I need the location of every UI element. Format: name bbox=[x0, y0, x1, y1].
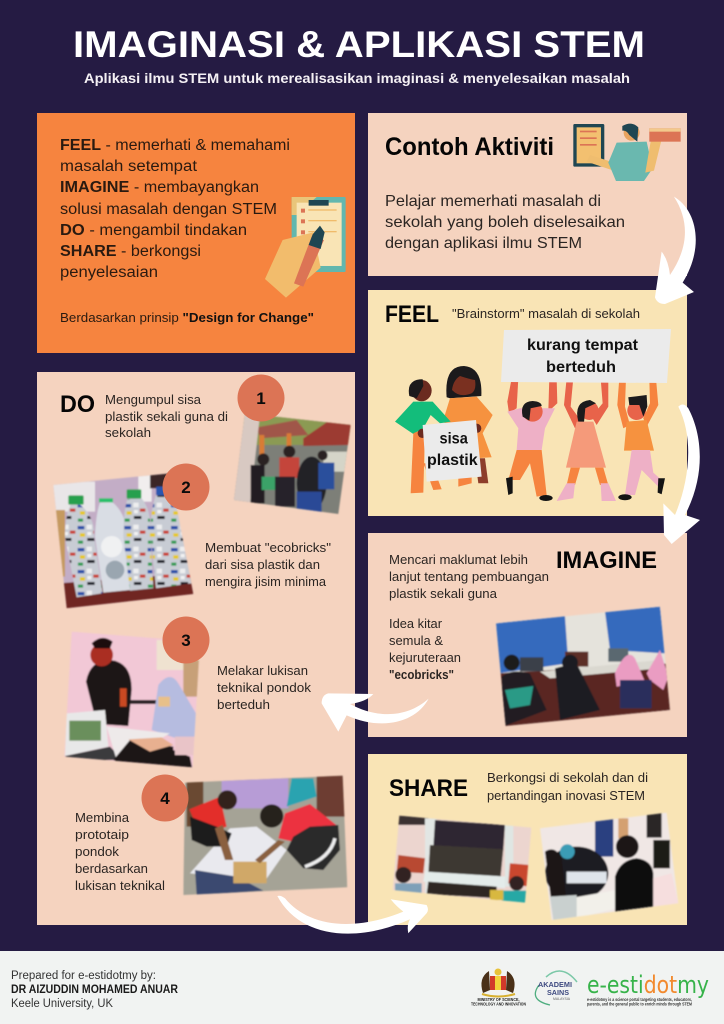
number badge 4: 4 bbox=[160, 789, 170, 808]
number badge 3: 3 bbox=[181, 631, 191, 650]
text block: Berkongsi di sekolah dan di bbox=[487, 770, 648, 785]
credit text bbox=[11, 970, 179, 1010]
step 1 text: sekolah bbox=[105, 425, 151, 440]
text block: feel imagine do share definitions: IMAGINE - membayangkan bbox=[60, 179, 259, 196]
step 3 text: teknikal pondok bbox=[217, 680, 312, 695]
caption: "Brainstorm" masalah di sekolah bbox=[452, 306, 640, 321]
panel: do bbox=[37, 372, 357, 925]
heading: IMAGINE bbox=[556, 547, 657, 574]
photo 4: building prototype bbox=[180, 773, 350, 897]
photo: competition booth bbox=[537, 812, 683, 922]
text block: feel imagine do share definitions: masalah setempat bbox=[60, 158, 198, 175]
logo: akademi sains malaysia: SAINS bbox=[547, 988, 569, 997]
logo: ministry crest: TECHNOLOGY AND INNOVATION bbox=[471, 1002, 526, 1006]
text block: research: plastik sekali guna bbox=[389, 586, 498, 601]
text block: idea: semula & bbox=[389, 633, 443, 648]
step 2 text: dari sisa plastik dan bbox=[205, 557, 320, 572]
girl in patterned dress bbox=[557, 378, 616, 501]
text block bbox=[385, 193, 625, 252]
girl in orange dress bbox=[443, 366, 493, 487]
illustration: children bbox=[395, 366, 665, 501]
photo 3: technical sketch bbox=[62, 630, 203, 770]
logo: akademi sains malaysia bbox=[535, 971, 577, 1005]
text block: feel imagine do share definitions bbox=[60, 137, 290, 281]
number badge 3 bbox=[162, 616, 210, 664]
panel: share bbox=[368, 754, 687, 925]
logo: akademi sains malaysia: AKADEMI bbox=[538, 980, 572, 989]
text block: feel imagine do share definitions: SHARE - berkongsi bbox=[60, 243, 201, 260]
text block: feel imagine do share definitions: penyelesaian bbox=[60, 264, 158, 281]
step 3 text bbox=[217, 663, 312, 712]
step 4 text bbox=[75, 810, 165, 893]
number badge 1: 1 bbox=[256, 389, 266, 408]
sign: kurang tempat berteduh: kurang tempat bbox=[527, 337, 639, 354]
text block: dengan aplikasi ilmu STEM bbox=[385, 235, 582, 252]
credit text: DR AIZUDDIN MOHAMED ANUAR bbox=[11, 984, 179, 996]
boy in pink shirt bbox=[506, 378, 557, 501]
step 2 text bbox=[205, 540, 331, 589]
step 4 text: prototaip bbox=[75, 827, 129, 842]
text block bbox=[487, 770, 648, 803]
logo: e-estidotmy: e-estidotmy bbox=[587, 971, 709, 999]
number badge 4 bbox=[142, 774, 188, 822]
step 4 text: Membina bbox=[75, 810, 130, 825]
logo: ministry crest: MINISTRY OF SCIENCE, bbox=[478, 997, 520, 1002]
subtitle: Aplikasi ilmu STEM untuk merealisasikan imaginasi & menyelesaikan masalah bbox=[84, 70, 630, 86]
step 1 text: Mengumpul sisa bbox=[105, 392, 202, 407]
text block: research: Mencari maklumat lebih bbox=[389, 552, 528, 567]
credit text: Keele University, UK bbox=[11, 998, 113, 1010]
text block: feel imagine do share definitions: solusi masalah dengan STEM bbox=[60, 201, 277, 218]
text block: idea bbox=[389, 616, 461, 682]
step 1 text: plastik sekali guna di bbox=[105, 409, 228, 424]
logo: e-estidotmy: parents, and the general public to enrich minds through STEM bbox=[587, 1002, 692, 1006]
text block: idea: "ecobricks" bbox=[389, 667, 454, 682]
number badge 1 bbox=[238, 374, 284, 422]
number badge 2 bbox=[162, 464, 210, 510]
credit text: Prepared for e-estidotmy by: bbox=[11, 970, 156, 982]
panel: contoh aktiviti bbox=[368, 113, 687, 276]
logo: akademi sains malaysia: MALAYSIA bbox=[553, 997, 571, 1001]
step 3 text: berteduh bbox=[217, 697, 270, 712]
text block: sekolah yang boleh diselesaikan bbox=[385, 214, 625, 231]
text block: research bbox=[389, 552, 549, 601]
text block: feel imagine do share definitions: DO - mengambil tindakan bbox=[60, 222, 247, 239]
heading: SHARE bbox=[389, 775, 468, 802]
photo 1: collecting plastic bbox=[234, 414, 352, 515]
panel: imagine bbox=[368, 533, 687, 737]
text block: research: lanjut tentang pembuangan bbox=[389, 569, 549, 584]
photo 2: ecobricks bbox=[50, 470, 197, 612]
title: IMAGINASI & APLIKASI STEM bbox=[73, 24, 645, 65]
text block: pertandingan inovasi STEM bbox=[487, 788, 645, 803]
photo: school sharing bbox=[390, 813, 533, 905]
footer band bbox=[0, 951, 724, 1024]
text block: Pelajar memerhati masalah di bbox=[385, 193, 601, 210]
arrow: feel to imagine bbox=[663, 405, 700, 544]
sign: sisa plastik bbox=[423, 420, 482, 482]
step 1 text bbox=[105, 392, 228, 440]
text block: idea: Idea kitar bbox=[389, 616, 443, 631]
text block: idea: kejuruteraan bbox=[389, 650, 461, 665]
boy in orange shirt bbox=[617, 378, 665, 500]
step 2 text: mengira jisim minima bbox=[205, 574, 327, 589]
sign: sisa plastik: plastik bbox=[427, 452, 478, 469]
panel: feel bbox=[368, 290, 687, 516]
icon: person with clipboard bbox=[573, 124, 681, 181]
note: design for change: Berdasarkan prinsip "Design for Change" bbox=[60, 310, 314, 325]
arrow: do to share bbox=[277, 896, 428, 934]
boy in green shirt bbox=[395, 379, 451, 493]
step 4 text: berdasarkan bbox=[75, 861, 148, 876]
arrow: contoh to feel bbox=[655, 197, 696, 304]
sign: kurang tempat berteduh bbox=[501, 329, 671, 383]
sign: kurang tempat berteduh: berteduh bbox=[546, 359, 616, 376]
heading: Contoh Aktiviti bbox=[385, 133, 554, 161]
step 4 text: lukisan teknikal bbox=[75, 878, 165, 893]
number badge 2: 2 bbox=[181, 478, 191, 497]
photo: computer lab bbox=[493, 605, 673, 728]
sign: sisa plastik: sisa bbox=[439, 430, 468, 447]
panel: principles bbox=[37, 113, 355, 353]
text block: feel imagine do share definitions: FEEL - memerhati & memahami bbox=[60, 137, 290, 154]
arrow: imagine to do bbox=[322, 693, 429, 732]
step 3 text: Melakar lukisan bbox=[217, 663, 308, 678]
logo: e-estidotmy: e-estidotmy is a science portal targeting students, educators, bbox=[587, 997, 692, 1002]
step 4 text: pondok bbox=[75, 844, 120, 859]
heading: FEEL bbox=[385, 301, 439, 328]
logo: ministry crest bbox=[471, 968, 526, 1006]
step 2 text: Membuat "ecobricks" bbox=[205, 540, 331, 555]
icon: clipboard and hand with pencil bbox=[265, 197, 346, 298]
heading: DO bbox=[60, 391, 95, 418]
